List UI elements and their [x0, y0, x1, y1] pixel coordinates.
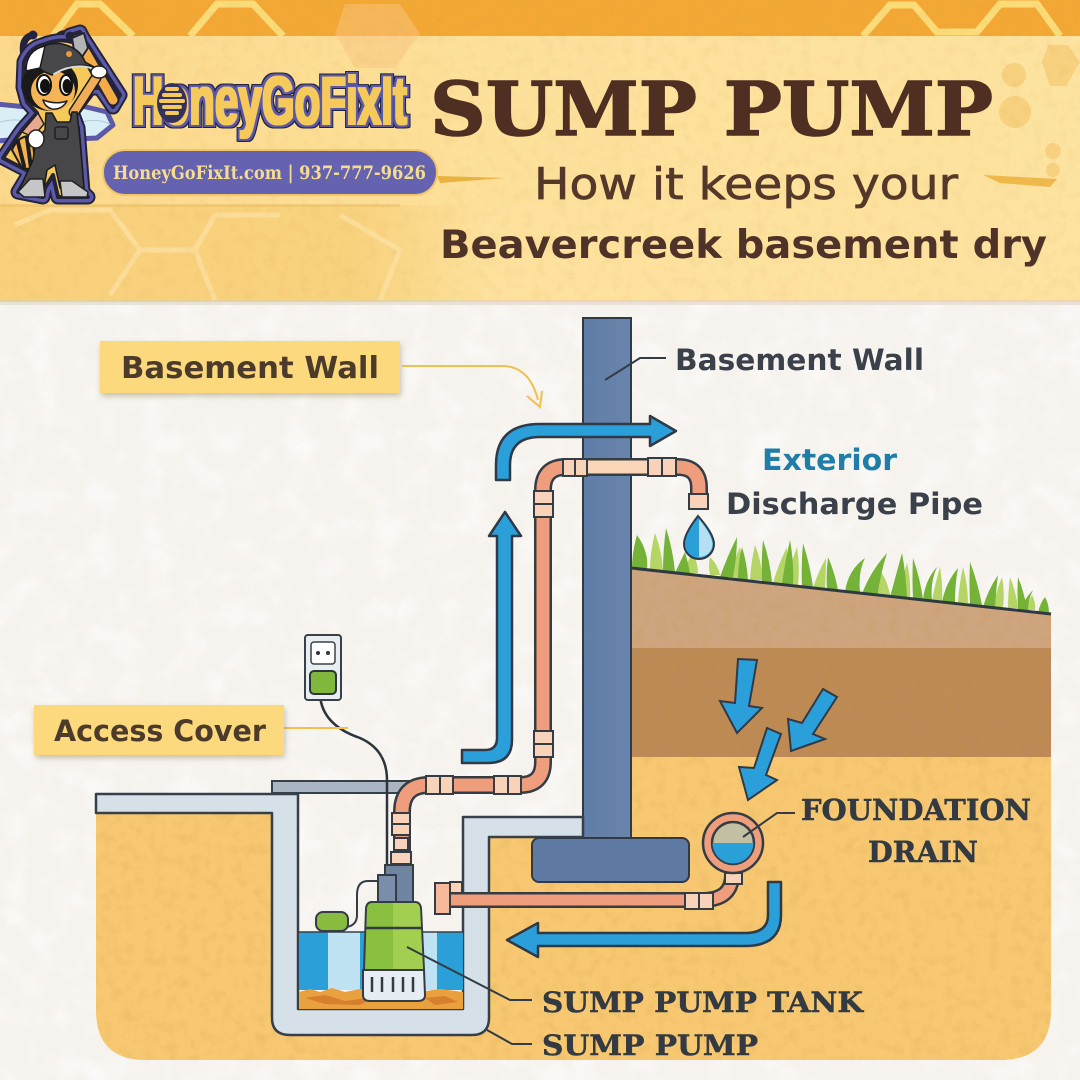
tag text: Access Cover	[54, 714, 267, 748]
float cable	[347, 881, 378, 927]
pump leader line	[487, 1030, 532, 1044]
drain water	[712, 843, 754, 863]
leader line	[605, 358, 666, 380]
mascot cap badge	[66, 51, 72, 57]
pill shape	[103, 150, 437, 195]
sand lower layer	[96, 757, 1051, 1060]
water body	[299, 932, 463, 990]
water surface line	[299, 931, 463, 933]
subtitle line two: Beavercreek basement dry	[440, 223, 1047, 268]
pump white base	[363, 970, 425, 1001]
light grass blades	[650, 533, 1035, 610]
foundation footing	[532, 838, 689, 882]
mascot boots	[18, 179, 88, 197]
pipe fill	[402, 467, 699, 866]
label line two: DRAIN	[868, 835, 978, 869]
leader line	[284, 727, 348, 729]
motor housing rear	[385, 865, 413, 903]
inlet pipe fittings	[435, 873, 742, 914]
arrow: water flowing along drain to the pit	[507, 882, 781, 957]
mascot side arm	[22, 113, 44, 137]
soil and ground	[96, 568, 1051, 1060]
tag background	[34, 705, 284, 755]
icon: foundation drain cross section	[703, 813, 763, 873]
brush stroke right	[983, 175, 1057, 187]
mascot glove side	[28, 130, 44, 148]
gravel	[299, 988, 463, 1009]
mascot eyes	[37, 75, 72, 95]
arrow: discharge flow over the wall	[496, 416, 676, 480]
mascot raised arm fill	[74, 78, 96, 112]
right basement wall label	[605, 343, 924, 380]
outlet socket	[311, 642, 335, 664]
header top orange honeycomb strip	[0, 0, 1080, 36]
label line two: Discharge Pipe	[726, 487, 983, 521]
sump pit concrete shell	[96, 794, 583, 1035]
label line one: Exterior	[762, 443, 898, 477]
pipe fittings	[391, 458, 708, 864]
label text: Basement Wall	[675, 343, 924, 377]
mascot cap crown	[38, 44, 96, 75]
mascot face	[31, 71, 75, 111]
arrow: basement wall tag pointer	[402, 366, 542, 407]
hive bands	[159, 87, 185, 115]
pump band line	[366, 927, 422, 929]
arrow: ground water left	[720, 659, 762, 733]
mascot antenna tips	[28, 30, 74, 40]
arrow: ground water centre	[739, 728, 781, 800]
topsoil layer	[631, 568, 1051, 648]
subsoil layer	[631, 648, 1051, 757]
mascot wrench head	[72, 33, 88, 60]
mascot glove top	[91, 66, 107, 78]
header texture	[0, 0, 1080, 302]
mascot wings	[0, 104, 113, 141]
socket holes	[316, 651, 330, 655]
mascot pocket	[55, 127, 68, 139]
title: SUMP PUMP	[430, 67, 993, 153]
drop highlight	[699, 519, 712, 557]
sand texture	[96, 757, 1051, 1060]
mascot sticker outline purple	[3, 32, 120, 197]
header bottom edge shadow	[0, 300, 1080, 305]
panel: basement wall column	[583, 318, 631, 838]
label line one: FOUNDATION	[801, 793, 1031, 827]
arrow: upward flow	[462, 512, 521, 763]
banner soft shadow line	[0, 204, 400, 207]
tank leader line	[407, 947, 532, 1000]
mascot antennae outline	[23, 34, 70, 60]
drop body	[684, 516, 714, 559]
honeycomb lines top strip	[53, 4, 1060, 36]
sump pump tank label: SUMP PUMP TANK	[542, 986, 865, 1019]
pipe ring	[703, 813, 763, 873]
contact pill	[103, 150, 437, 195]
pale pipe section through wall	[586, 460, 648, 474]
pump green body	[364, 902, 424, 970]
mascot overalls	[20, 112, 84, 188]
pump intake slots	[372, 977, 413, 992]
header lower honey background	[0, 0, 1080, 302]
mascot pupils	[40, 79, 72, 93]
gravel speckle	[305, 995, 458, 1005]
tag text: Basement Wall	[121, 351, 379, 386]
banner right honey spots	[999, 45, 1080, 177]
logo wordmark: HoneyGoFixIt	[133, 63, 407, 139]
arrow: ground water right	[788, 689, 837, 751]
tag background	[100, 341, 400, 393]
sump pump labels	[407, 947, 865, 1062]
mascot cap brim highlight	[54, 66, 94, 74]
mascot sticker outline gold	[3, 32, 120, 197]
icon: logo beehive	[157, 83, 187, 123]
water highlight left	[328, 932, 360, 990]
mascot raised arm	[74, 78, 96, 112]
mascot cap white panel	[26, 46, 45, 71]
mascot sticker outline dark	[3, 32, 120, 197]
pump body light panel	[393, 903, 423, 969]
mascot wrench handle	[82, 46, 113, 100]
lower faint honeycomb lines	[15, 210, 400, 300]
ground surface line	[631, 568, 1051, 614]
icon: bee mascot	[0, 30, 120, 197]
mascot smile	[43, 100, 67, 109]
inlet pipe fill	[450, 875, 732, 900]
header cream banner	[0, 36, 1080, 205]
sump water	[299, 932, 463, 1009]
hive base	[157, 83, 187, 123]
callout: access cover tag	[34, 705, 348, 755]
sump pump label: SUMP PUMP	[542, 1029, 758, 1062]
access cover	[272, 781, 422, 793]
inlet pipe from foundation drain	[450, 875, 732, 900]
leader line	[743, 813, 795, 837]
brush stroke left	[437, 176, 505, 183]
soil texture	[636, 574, 1051, 642]
icon: water drop	[684, 516, 714, 559]
discharge pipe	[402, 467, 699, 866]
power cord to outlet	[320, 680, 387, 865]
callout: basement wall tag	[100, 341, 400, 393]
green plug	[310, 671, 336, 694]
mascot tail stripes	[18, 138, 31, 168]
motor housing front	[378, 875, 396, 903]
pipe outline	[402, 467, 699, 866]
inlet pipe outline	[450, 875, 732, 900]
banner top centre hex	[335, 4, 420, 68]
icon: submersible sump pump	[316, 865, 425, 1001]
icon: wall outlet with plug	[305, 635, 341, 700]
subtitle line one: How it keeps your	[534, 159, 959, 210]
grass	[631, 528, 1051, 614]
panel: header	[0, 0, 1080, 305]
foundation drain label	[743, 793, 1031, 869]
water highlight right	[423, 932, 437, 990]
mascot wing veins	[0, 120, 110, 124]
mascot hair	[22, 59, 78, 111]
background paper texture	[0, 302, 1080, 1080]
mascot wrench handle fill	[82, 46, 113, 100]
outlet plate	[305, 635, 341, 700]
mascot tail	[12, 136, 36, 170]
drain interior air	[712, 822, 754, 864]
website and phone: HoneyGoFixIt.com | 937-777-9626	[113, 162, 426, 184]
exterior discharge pipe label	[726, 443, 983, 521]
float switch	[316, 912, 348, 931]
dark grass blades	[632, 528, 1049, 613]
